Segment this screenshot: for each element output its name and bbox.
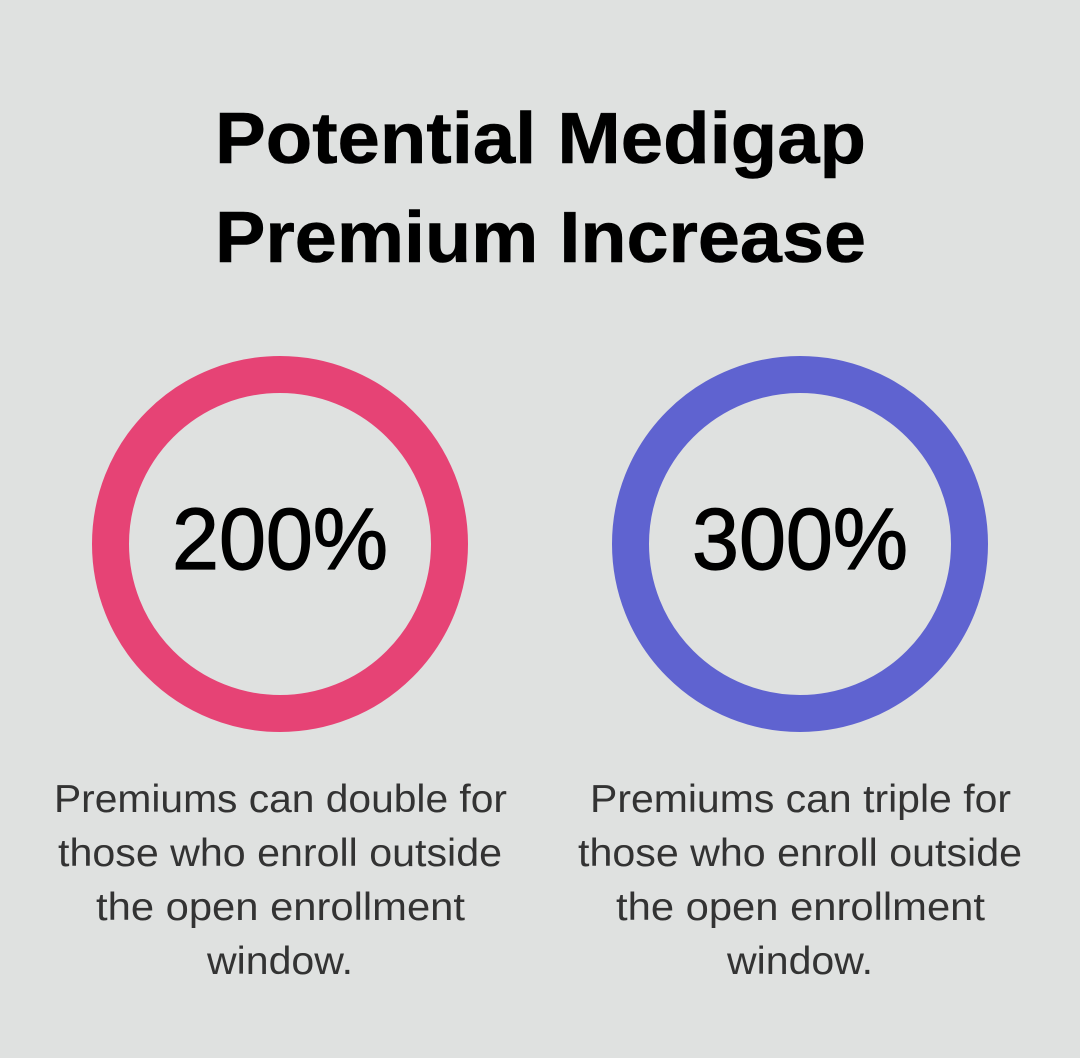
- description: double: Premiums can double for: [54, 778, 507, 821]
- title: Potential Medigap: [215, 99, 866, 179]
- description: double: those who enroll outside: [58, 832, 502, 875]
- description: triple: those who enroll outside: [578, 832, 1022, 875]
- ring: blue: [630, 374, 970, 714]
- description: triple: the open enrollment: [616, 886, 985, 929]
- description: triple: [578, 778, 1022, 983]
- number: 300%: 300%: [692, 491, 908, 588]
- title: [215, 99, 866, 278]
- description: double: [54, 778, 507, 983]
- description: double: the open enrollment: [96, 886, 465, 929]
- number: 200%: 200%: [172, 491, 388, 588]
- panel: 300% stat: [578, 374, 1022, 983]
- description: double: window.: [206, 940, 353, 983]
- ring: pink: [110, 374, 450, 714]
- description: triple: window.: [726, 940, 873, 983]
- panel: 200% stat: [54, 374, 507, 983]
- title: Premium Increase: [215, 198, 866, 278]
- description: triple: Premiums can triple for: [590, 778, 1011, 821]
